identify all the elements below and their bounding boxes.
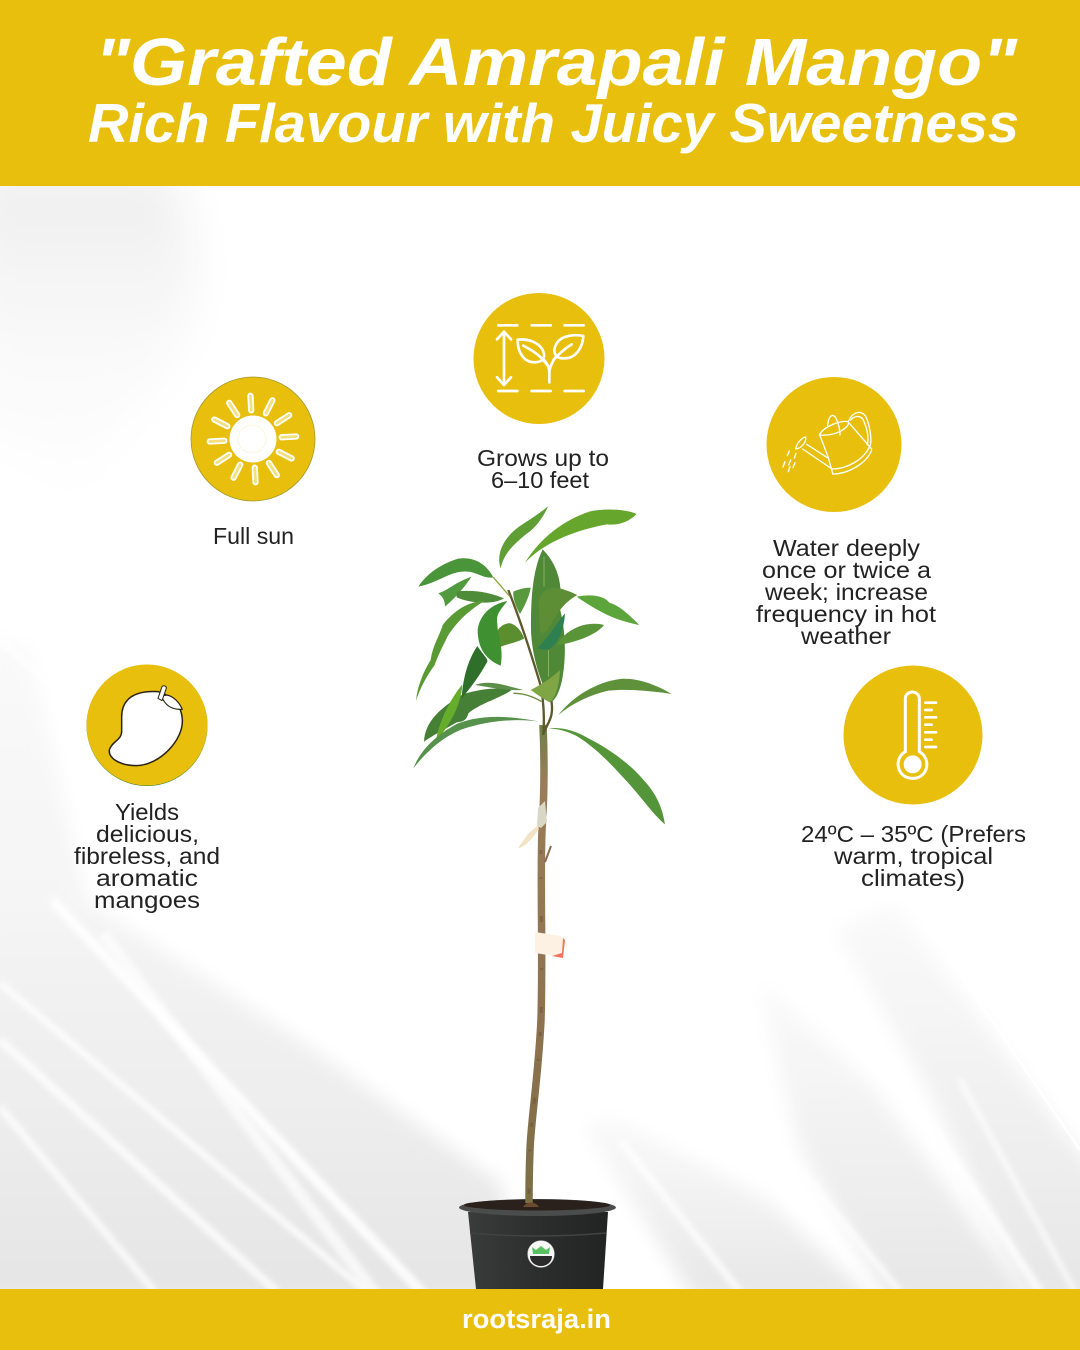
label: temperature: 24ºC – 35ºC (Prefers — [801, 821, 1026, 847]
icon: watering can — [766, 377, 902, 512]
label: fruit: fibreless, and — [74, 843, 220, 869]
mango plant in pot — [413, 506, 672, 1289]
pot — [459, 1199, 616, 1289]
graft tape — [518, 801, 551, 862]
label: fruit: delicious, — [96, 821, 199, 847]
label: height: 6–10 feet — [491, 467, 589, 493]
label: fruit: mangoes — [94, 887, 200, 913]
website: rootsraja.in — [462, 1304, 611, 1334]
footer banner — [0, 1289, 1080, 1350]
label: watering: week; increase — [764, 579, 928, 605]
label: height: Grows up to — [477, 445, 609, 471]
title: "Grafted Amrapali Mango" — [95, 25, 1018, 100]
label: temperature: climates) — [861, 865, 965, 891]
label: fruit: aromatic — [96, 865, 198, 891]
label: watering: Water deeply — [773, 535, 920, 561]
item: sun — [191, 377, 315, 549]
pot logo badge — [528, 1240, 554, 1268]
label: temperature: warm, tropical — [833, 843, 993, 869]
plant tag — [535, 932, 565, 958]
header banner — [0, 0, 1080, 186]
label: watering: once or twice a — [762, 557, 932, 583]
item: height — [474, 293, 609, 493]
label: watering: frequency in hot — [756, 601, 936, 627]
icon: mango — [86, 664, 208, 786]
leaves — [413, 506, 672, 824]
trunk — [523, 725, 544, 1207]
subtitle: Rich Flavour with Juicy Sweetness — [88, 92, 1019, 154]
label: fruit: Yields — [115, 799, 179, 825]
icon: thermometer — [844, 666, 982, 804]
item: watering — [756, 377, 936, 649]
icon: sun — [191, 377, 315, 501]
item: fruit — [74, 664, 220, 913]
label: sun: Full sun — [213, 523, 294, 549]
icon: plant height — [474, 293, 604, 424]
label: watering: weather — [800, 623, 891, 649]
item: temperature — [801, 666, 1026, 891]
